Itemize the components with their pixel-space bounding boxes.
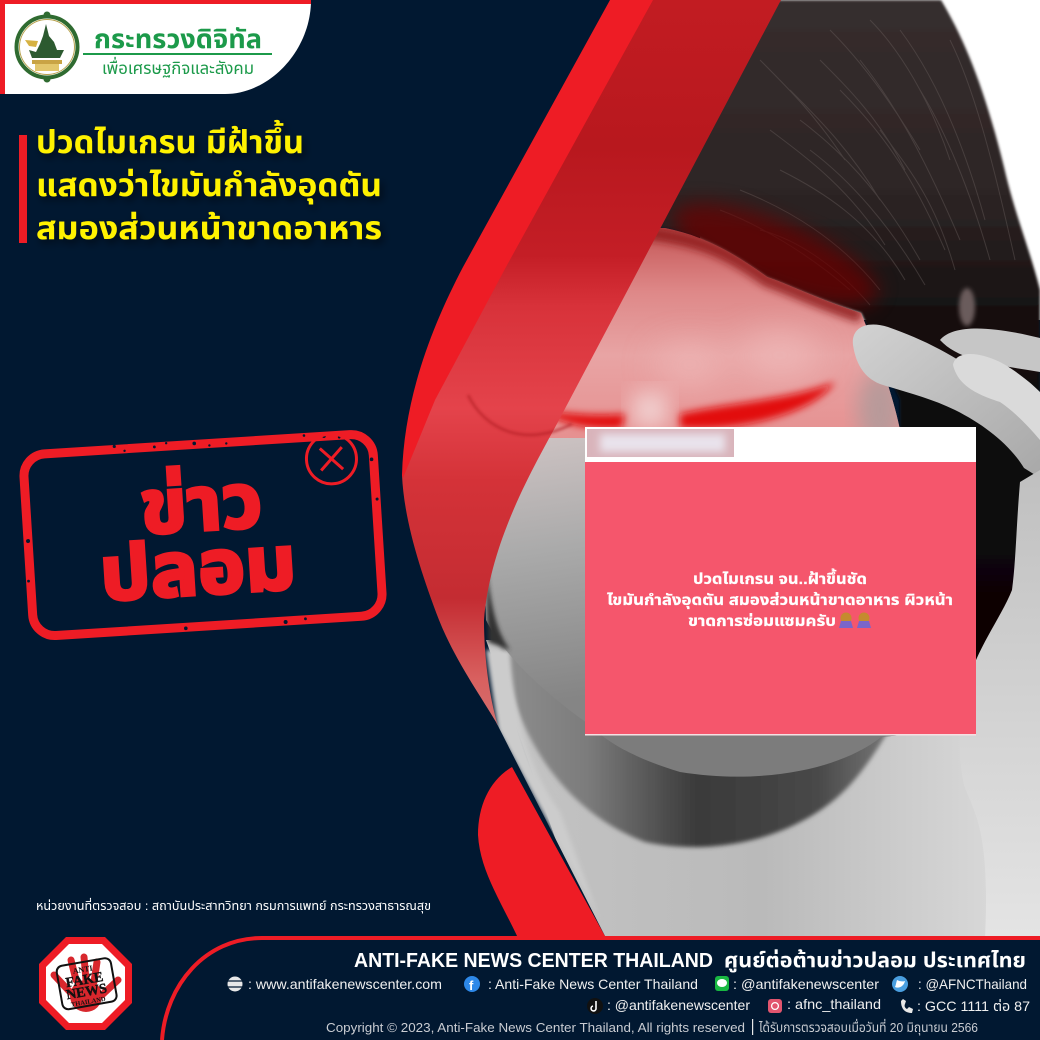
post text xyxy=(607,568,953,630)
icon: tiktok xyxy=(587,998,603,1014)
icon: line xyxy=(715,976,729,991)
title: แสดงว่าไขมันกำลังอุดตัน xyxy=(36,167,382,204)
footer contacts: : afnc_thailand xyxy=(787,996,881,1012)
icon: facebook: f xyxy=(469,978,474,993)
sign label xyxy=(56,957,118,1010)
footer contacts: : @antifakenewscenter xyxy=(733,976,879,992)
photo: neck shadow xyxy=(500,630,895,847)
photo: face xyxy=(470,220,910,790)
footer contacts xyxy=(227,976,1030,1014)
sign label: FAKE xyxy=(65,970,105,991)
copyright line: ได้รับการตรวจสอบเมื่อวันที่ 20 มิถุนายน 2566 xyxy=(758,1018,978,1035)
post background xyxy=(585,462,976,735)
icon: facebook xyxy=(464,976,480,993)
stamp wear xyxy=(19,429,386,640)
verifying agency: หน่วยงานที่ตรวจสอบ : สถาบันประสาทวิทยา กรมการแพทย์ กระทรวงสาธารณสุข xyxy=(36,897,431,913)
photo: collar strip xyxy=(486,650,600,920)
footer contacts: : GCC 1111 ต่อ 87 xyxy=(917,998,1030,1014)
copyright line: Copyright © 2023, Anti-Fake News Center Thailand, All rights reserved xyxy=(326,1020,745,1035)
post bottom edge xyxy=(585,734,976,736)
post text: ไขมันกำลังอุดตัน สมองส่วนหน้าขาดอาหาร ผิวหน้า xyxy=(607,591,953,609)
footer contacts: : Anti-Fake News Center Thailand xyxy=(488,976,698,992)
ministry tagline: เพื่อเศรษฐกิจและสังคม xyxy=(102,56,254,78)
photo: chin xyxy=(603,736,896,777)
photo: nose bridge xyxy=(632,392,668,428)
red lower blob xyxy=(478,767,606,938)
title: สมองส่วนหน้าขาดอาหาร xyxy=(36,210,382,246)
icon: instagram xyxy=(768,999,782,1013)
post text: ปวดไมเกรน จน..ฝ้าขึ้นชัด xyxy=(693,568,867,588)
photo: supporting hand xyxy=(960,470,1040,938)
photo: forehead bright patches xyxy=(656,333,820,383)
stamp text: ข่าว xyxy=(138,458,265,551)
title xyxy=(36,119,382,246)
stamp border xyxy=(23,433,383,637)
photo: hair strands xyxy=(720,20,1015,305)
band eyelid crease xyxy=(468,395,572,435)
stamp: fake news: ปลอม xyxy=(98,520,299,618)
footer heading: ANTI-FAKE NEWS CENTER THAILAND xyxy=(354,950,713,972)
ministry rule xyxy=(83,53,272,55)
footer heading xyxy=(354,950,1026,972)
copyright line xyxy=(326,1018,978,1035)
title: ปวดไมเกรน มีฝ้าขึ้น xyxy=(36,119,304,160)
post header xyxy=(585,427,976,462)
photo: brows xyxy=(540,382,835,429)
photo: forehead xyxy=(549,228,900,438)
photo: woman with headache xyxy=(470,0,1040,938)
sign label: NEWS xyxy=(65,981,108,1003)
photo: temple shade xyxy=(850,372,900,427)
photo: ear xyxy=(959,288,975,326)
screenshot of false post xyxy=(585,427,976,736)
logo: anti-fake news stop sign xyxy=(39,937,132,1030)
photo: hair red glow xyxy=(660,182,890,328)
ministry name: กระทรวงดิจิทัล xyxy=(94,24,262,54)
footer contacts: : www.antifakenewscenter.com xyxy=(248,976,442,992)
accent bar xyxy=(19,135,27,243)
post blurred name xyxy=(587,429,734,457)
translucent red band xyxy=(402,0,781,726)
icon: phone xyxy=(901,999,913,1013)
photo: jaw shadow xyxy=(486,560,510,650)
footer contacts: : @AFNCThailand xyxy=(918,976,1027,992)
logo red frame xyxy=(0,0,311,94)
sign label: THAILAND xyxy=(71,996,107,1009)
photo: shirt xyxy=(486,640,1040,938)
icon: ministry emblem xyxy=(16,12,78,82)
footer heading: ศูนย์ต่อต้านข่าวปลอม ประเทศไทย xyxy=(724,950,1026,972)
sign hand xyxy=(54,957,118,1012)
footer contacts: : @antifakenewscenter xyxy=(607,997,750,1013)
photo: hair xyxy=(640,0,1040,720)
sign label: ANTI xyxy=(72,964,93,976)
stamp: fake news xyxy=(19,429,386,640)
icon: twitter xyxy=(892,976,908,992)
footer panel xyxy=(162,938,1040,1040)
navy panel edge xyxy=(0,0,610,938)
stamp x icon xyxy=(305,432,358,485)
logo panel xyxy=(0,0,311,94)
photo: soft hairline xyxy=(640,232,861,316)
post text: ขาดการซ่อมแซมครับ xyxy=(688,612,836,630)
icon: website xyxy=(227,976,243,992)
icon: facepalm emoji pair xyxy=(839,612,871,628)
photo: fingers at temple xyxy=(853,324,1040,478)
red ribbon xyxy=(402,0,653,478)
